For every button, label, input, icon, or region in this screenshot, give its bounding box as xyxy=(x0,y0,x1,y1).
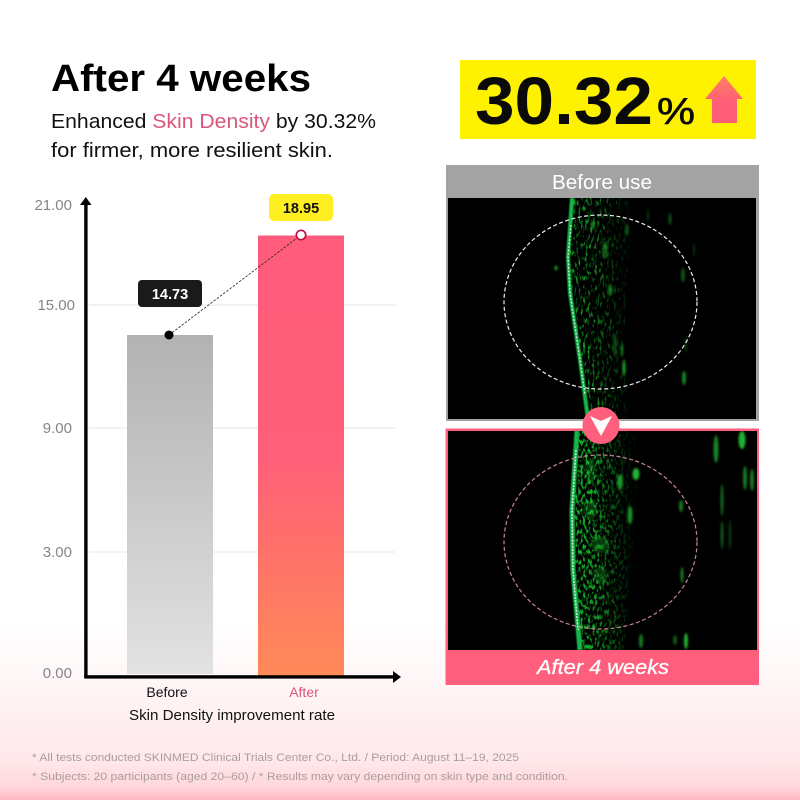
value label: 18.95: 18.95 xyxy=(283,201,319,217)
footnotes: * Subjects: 20 participants (aged 20–60) / * Results may vary depending on skin type and condition. xyxy=(32,771,568,783)
y axis labels: 15.00 xyxy=(37,297,75,314)
footnotes xyxy=(32,752,568,783)
y axis labels: 3.00 xyxy=(43,544,72,561)
background gradient xyxy=(0,620,800,800)
panel: before use xyxy=(446,165,759,421)
subtitle text: Enhanced Skin Density by 30.32% xyxy=(51,110,376,133)
callout: 30.32% increase: % xyxy=(657,91,695,132)
grid lines xyxy=(89,305,396,552)
bar: before xyxy=(127,335,213,674)
bar: after xyxy=(258,236,344,676)
x axis label: after: After xyxy=(289,684,319,700)
y axis labels: 9.00 xyxy=(43,420,72,437)
bar chart xyxy=(34,194,401,724)
ultrasound image: after xyxy=(448,431,757,651)
chart caption: Skin Density improvement rate xyxy=(129,708,335,724)
subtitle text: for firmer, more resilient skin. xyxy=(51,139,333,162)
dashed highlight ellipse xyxy=(504,215,697,389)
marker: before xyxy=(164,330,174,340)
subtitle text xyxy=(51,110,376,162)
value label: 18.95 xyxy=(269,194,333,221)
value label: 14.73: 14.73 xyxy=(152,287,188,303)
panel: after 4 weeks xyxy=(446,428,759,685)
icon: down arrow badge xyxy=(582,407,620,444)
panel heading: Before use xyxy=(552,172,652,194)
axes xyxy=(80,197,401,683)
callout: 30.32% increase: 30.32 xyxy=(475,64,653,139)
connector line xyxy=(169,235,301,335)
y axis labels: 0.00 xyxy=(43,665,72,682)
icon: up arrow xyxy=(705,76,743,123)
panel heading: After 4 weeks xyxy=(535,656,669,679)
value label: 14.73 xyxy=(138,280,202,307)
dashed highlight ellipse xyxy=(504,455,697,629)
y axis labels: 21.00 xyxy=(34,197,72,214)
ultrasound image: before xyxy=(448,198,756,420)
x axis label: before: Before xyxy=(146,684,188,700)
y axis labels xyxy=(34,197,75,682)
marker: after xyxy=(296,230,306,240)
footnotes: * All tests conducted SKINMED Clinical Trials Center Co., Ltd. / Period: August 11–19, 2025 xyxy=(32,752,519,764)
title: After 4 weeks xyxy=(51,58,311,100)
callout: 30.32% increase xyxy=(460,60,756,139)
